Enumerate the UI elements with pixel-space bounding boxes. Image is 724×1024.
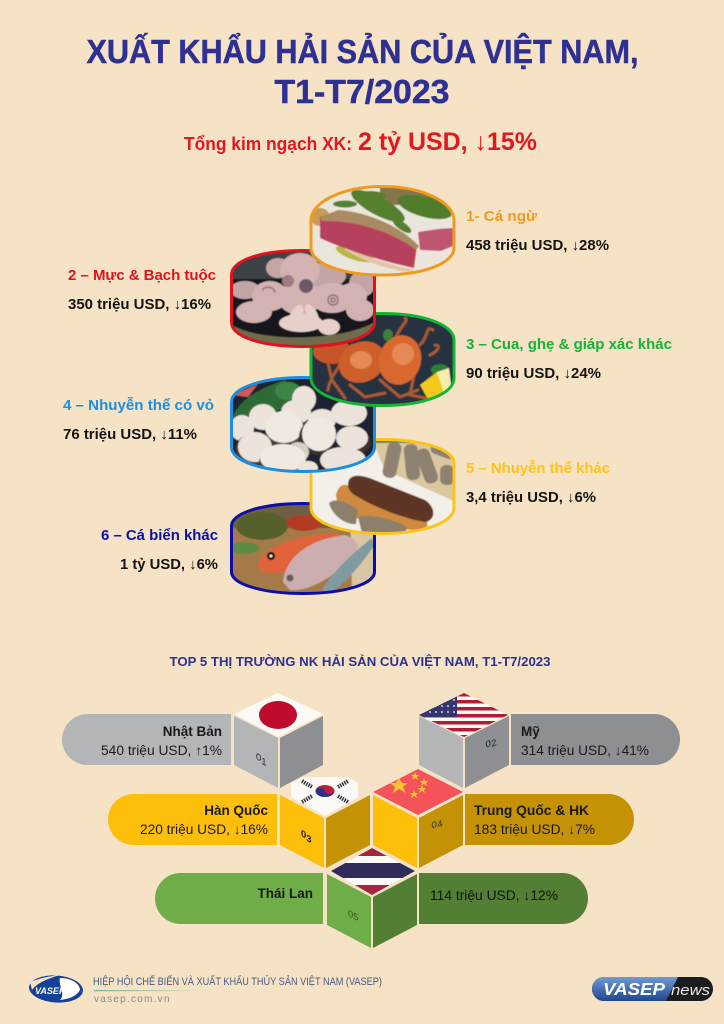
label 1: tuna	[466, 209, 609, 254]
market 4: China pill: 183 triệu USD, ↓7%	[474, 822, 595, 837]
label 2: squid and octopus	[68, 268, 216, 313]
subtitle: total export value: 2 tỷ USD, ↓15%	[358, 128, 537, 156]
photo: tuna, orange frame	[309, 184, 456, 277]
market 5: Thailand cube: 05	[348, 908, 359, 924]
label 6: other marine fish: 1 tỷ USD, ↓6%	[120, 557, 218, 573]
footer: gradient rule	[94, 990, 212, 991]
market 2: USA cube: 2	[490, 737, 497, 750]
market 5: Thailand cube	[327, 848, 417, 948]
photo: octopus, red frame	[230, 249, 377, 349]
market 1: Japan cube: 0	[256, 751, 261, 764]
market 5: Thailand right pill	[419, 873, 588, 924]
label 4: bivalves	[63, 397, 214, 443]
market 2: USA pill	[511, 714, 680, 765]
market 3: Korea pill: 220 triệu USD, ↓16%	[140, 822, 268, 837]
market 1: Japan pill: Nhật Bản	[163, 724, 222, 739]
label 1: tuna: 458 triệu USD, ↓28%	[466, 238, 609, 254]
label 5: other molluscs: 3,4 triệu USD, ↓6%	[466, 490, 596, 506]
label 2: squid and octopus: 2 – Mực & Bạch tuộc	[68, 268, 216, 284]
footer: VASEP news badge: VASEP	[603, 979, 665, 999]
section heading: top 5 markets: TOP 5 THỊ TRƯỜNG NK HẢI SẢN CỦA VIỆT NAM, T1-T7/2023	[170, 654, 551, 669]
footer: website: vasep.com.vn	[94, 994, 171, 1005]
market 2: USA cube: 0	[485, 738, 492, 751]
market 1: Japan cube	[234, 693, 323, 788]
photo: fish, blue frame	[230, 502, 377, 595]
footer: VASEP news badge: news	[671, 982, 711, 999]
market 4: China cube	[373, 769, 463, 868]
market 2: USA pill: 314 triệu USD, ↓41%	[521, 743, 649, 758]
label 5: other molluscs: 5 – Nhuyễn thể khác	[466, 460, 610, 477]
photo: clams, blue frame	[230, 376, 377, 476]
title: T1-T7/2023	[274, 73, 450, 110]
market 1: Japan cube: 1	[261, 756, 267, 769]
market 5: Thailand left pill: Thái Lan	[257, 886, 313, 901]
footer: VASEP news badge	[592, 977, 713, 1001]
label 6: other marine fish	[101, 528, 218, 573]
market 2: USA pill: Mỹ	[521, 724, 540, 739]
market 1: Japan pill	[62, 714, 231, 765]
market 4: China cube: 0	[431, 819, 438, 832]
footer: VASEP logo: VASEP	[35, 986, 66, 996]
label 6: other marine fish: 6 – Cá biển khác	[101, 528, 218, 544]
market 4: China pill	[465, 794, 634, 845]
label 3: crab: 3 – Cua, ghẹ & giáp xác khác	[466, 337, 672, 353]
footer: VASEP logo	[28, 974, 84, 1004]
label 2: squid and octopus: 350 triệu USD, ↓16%	[68, 297, 211, 313]
market 4: China cube: 4	[436, 818, 444, 831]
subtitle: total export value: Tổng kim ngạch XK:	[184, 134, 352, 154]
photo: sea cucumber, yellow frame	[309, 438, 457, 535]
market 4: China pill: Trung Quốc & HK	[474, 803, 589, 818]
label 3: crab	[466, 337, 672, 382]
market 3: Korea cube	[280, 777, 370, 868]
footer: association name: HIỆP HỘI CHẾ BIẾN VÀ XUẤT KHẨU THỦY SẢN VIỆT NAM (VASEP)	[93, 975, 382, 988]
market 3: Korea pill	[108, 794, 277, 845]
market 3: Korea cube: 0	[301, 828, 306, 841]
label 3: crab: 90 triệu USD, ↓24%	[466, 366, 601, 382]
market 3: Korea cube: 3	[306, 833, 312, 846]
market 5: Thailand left pill	[155, 873, 323, 924]
label 5: other molluscs	[466, 460, 610, 506]
photo: crab, green frame	[309, 312, 456, 407]
label 1: tuna: 1- Cá ngừ	[466, 209, 538, 225]
market 2: USA cube	[419, 693, 509, 788]
label 4: bivalves: 76 triệu USD, ↓11%	[63, 427, 197, 443]
label 4: bivalves: 4 – Nhuyễn thể có vỏ	[63, 397, 214, 414]
market 3: Korea pill: Hàn Quốc	[204, 803, 268, 818]
market 5: Thailand right pill: 114 triệu USD, ↓12%	[430, 888, 558, 903]
title: XUẤT KHẨU HẢI SẢN CỦA VIỆT NAM,	[86, 33, 638, 70]
market 1: Japan pill: 540 triệu USD, ↑1%	[101, 743, 222, 758]
title	[86, 33, 638, 110]
